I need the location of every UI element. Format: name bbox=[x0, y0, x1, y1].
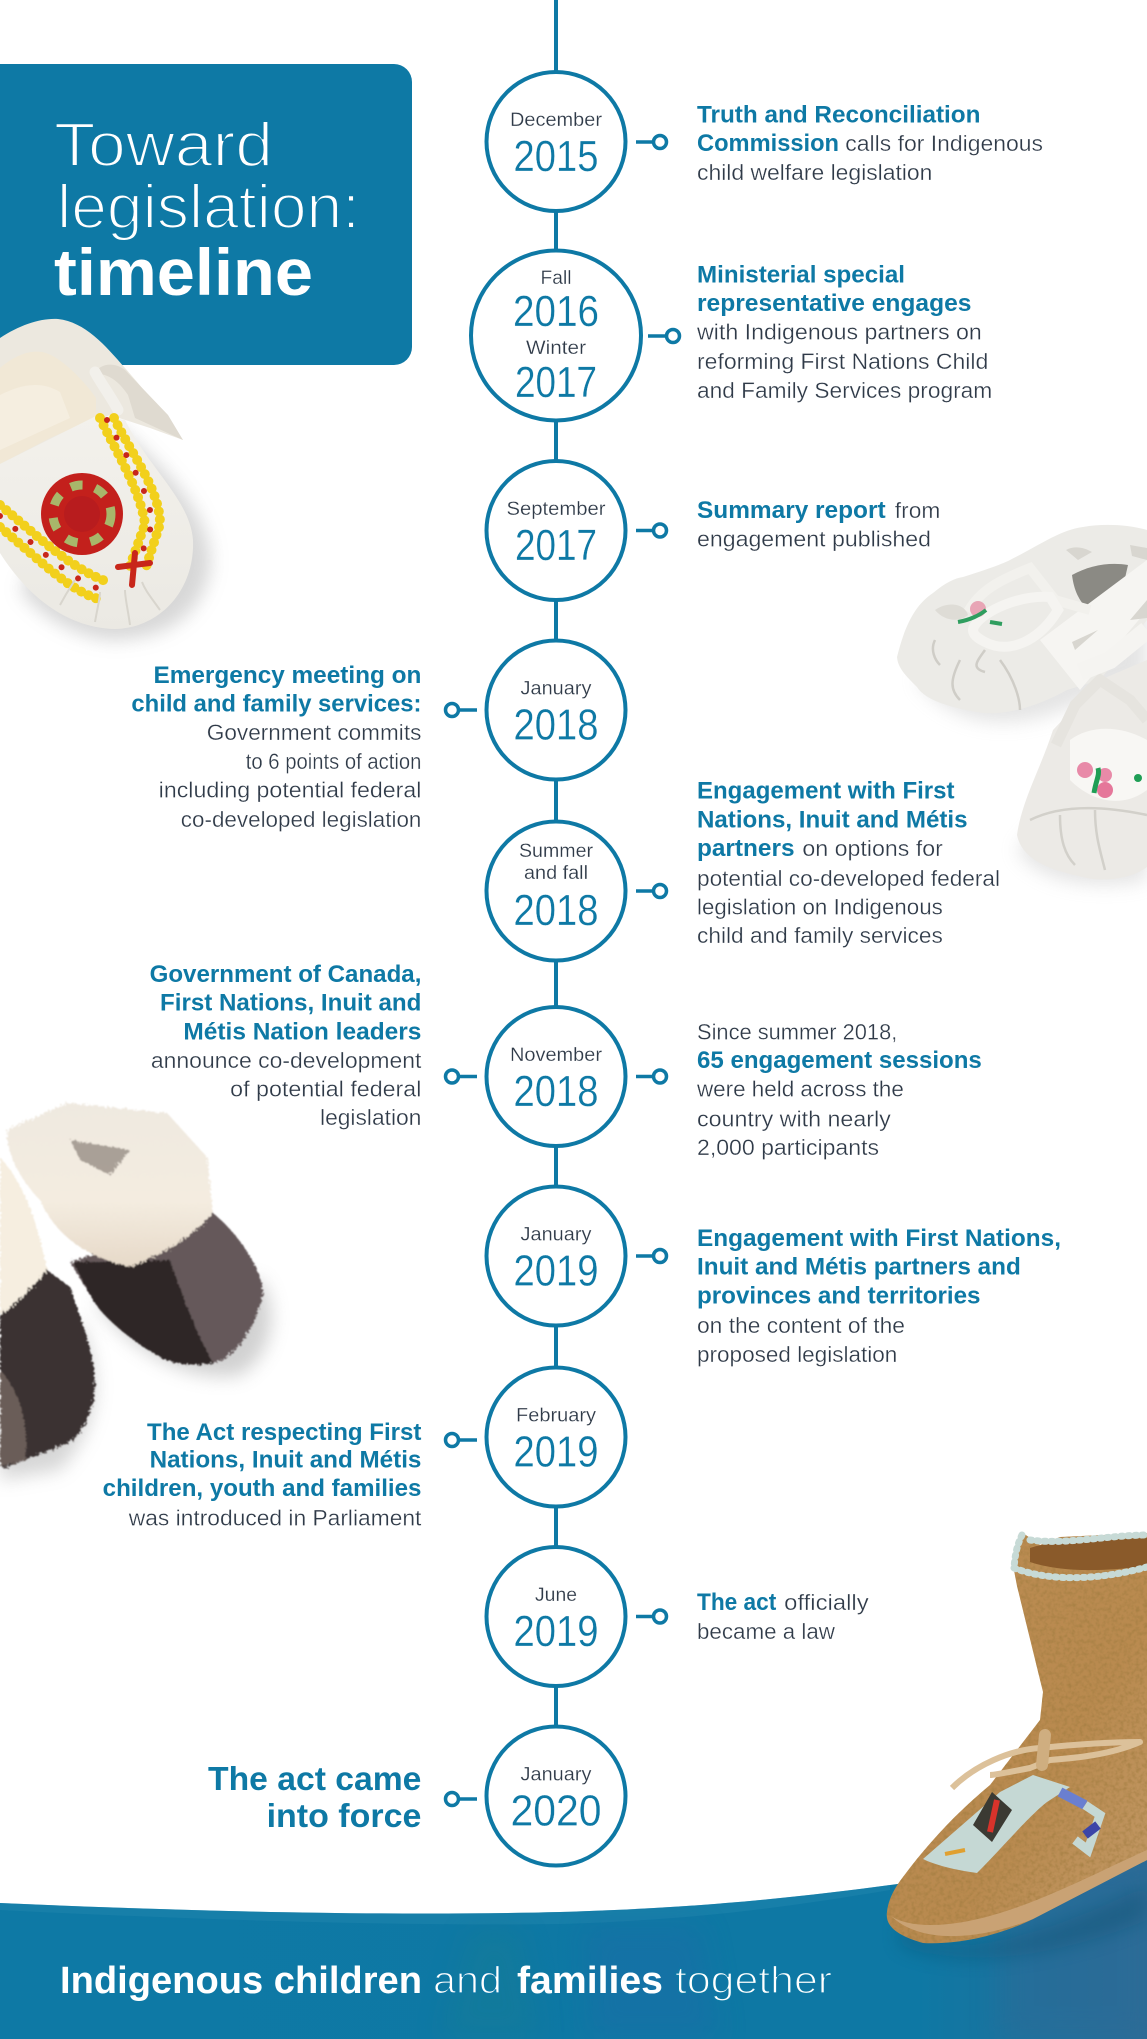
connector bbox=[446, 1434, 477, 1446]
node: January 2019 bbox=[486, 1186, 1061, 1367]
text: Engagement on proposed legislation: on the content of the bbox=[697, 1313, 905, 1338]
text: Government of Canada leaders: announce co-development bbox=[151, 1048, 421, 1073]
node: January 2020 bbox=[208, 1726, 626, 1866]
node: January 2018: January bbox=[520, 678, 592, 700]
text: 65 engagement sessions bbox=[696, 1019, 982, 1160]
node: September 2017: September bbox=[506, 499, 606, 520]
text: Engagement with partners bbox=[697, 778, 1000, 948]
node: September 2017: 2017 bbox=[515, 521, 597, 570]
node: February 2019: February bbox=[516, 1406, 597, 1426]
connector right bbox=[636, 1070, 666, 1083]
title: Toward legislation: timeline bbox=[54, 111, 360, 309]
text: Government of Canada leaders: Métis Nation leaders bbox=[183, 1018, 421, 1045]
text: Engagement on proposed legislation bbox=[697, 1225, 1061, 1367]
text: 65 engagement sessions: country with nearly bbox=[697, 1106, 891, 1131]
connector bbox=[636, 884, 666, 898]
text: Government of Canada leaders: legislation bbox=[320, 1105, 421, 1130]
connector bbox=[636, 524, 666, 537]
title: Toward legislation: timeline: Toward bbox=[54, 111, 273, 180]
text: The Act introduced: Nations, Inuit and Métis bbox=[150, 1446, 421, 1474]
title panel bbox=[0, 64, 412, 365]
node: February 2019 bbox=[103, 1368, 625, 1531]
text: Engagement on proposed legislation: Engagement with First Nations, bbox=[697, 1225, 1061, 1252]
text: Ministerial special representative: and Family Services program bbox=[697, 378, 992, 403]
connector bbox=[648, 330, 680, 342]
node: Fall 2016 Winter 2017 bbox=[471, 250, 992, 420]
photo: tan beaded moccasin boot bbox=[887, 1533, 1147, 1959]
title: Toward legislation: timeline: legislation: bbox=[57, 173, 360, 242]
slogan: families bbox=[517, 1960, 663, 2002]
node: January 2019: 2019 bbox=[514, 1246, 598, 1296]
text: Engagement with partners: potential co-developed federal bbox=[697, 866, 1000, 891]
text: Truth and Reconciliation Commission: Commission bbox=[697, 130, 839, 157]
text: Engagement on proposed legislation: proposed legislation bbox=[697, 1342, 897, 1367]
text: Ministerial special representative: representative engages bbox=[697, 290, 971, 317]
text: Summary report: Summary report bbox=[697, 497, 886, 524]
slogan: and bbox=[433, 1960, 502, 2002]
timeline spine bbox=[554, 0, 558, 1796]
text: The act became law: officially bbox=[784, 1590, 869, 1615]
node: November 2018: 2018 bbox=[514, 1067, 598, 1116]
text: Emergency meeting bbox=[131, 662, 421, 832]
text: Ministerial special representative: reforming First Nations Child bbox=[697, 349, 988, 374]
node: June 2019: 2019 bbox=[514, 1607, 598, 1656]
text: The Act introduced: was introduced in Parliament bbox=[128, 1506, 421, 1531]
text: Truth and Reconciliation Commission: Truth and Reconciliation bbox=[697, 102, 980, 128]
text: Engagement with partners: partners bbox=[697, 835, 794, 862]
node: Fall 2016 Winter 2017: Fall bbox=[540, 268, 572, 289]
node: Summer and fall 2018: 2018 bbox=[514, 886, 598, 935]
text: Engagement with partners: Nations, Inuit and Métis bbox=[697, 806, 968, 833]
text: Engagement with partners: child and family services bbox=[697, 923, 943, 948]
node: June 2019 bbox=[486, 1547, 869, 1686]
text: 65 engagement sessions: 65 engagement sessions bbox=[697, 1047, 982, 1074]
connector bbox=[636, 1610, 666, 1623]
text: Emergency meeting: Emergency meeting on bbox=[154, 662, 421, 689]
node: November 2018 bbox=[150, 961, 982, 1160]
text: Emergency meeting: Government commits bbox=[207, 720, 421, 745]
text: Engagement with partners: legislation on Indigenous bbox=[697, 894, 943, 919]
node: Summer and fall 2018 bbox=[486, 778, 1000, 960]
text: The Act introduced: children, youth and families bbox=[103, 1475, 421, 1502]
text: Ministerial special representative: Ministerial special bbox=[697, 262, 905, 288]
text: Engagement with partners: Engagement with First bbox=[697, 778, 955, 805]
node: Fall 2016 Winter 2017: 2017 bbox=[515, 358, 597, 407]
text: Truth and Reconciliation Commission bbox=[697, 102, 1043, 185]
node: June 2019: June bbox=[535, 1585, 577, 1606]
text: The Act introduced: The Act respecting First bbox=[147, 1419, 421, 1446]
node: Summer and fall 2018: and fall bbox=[524, 863, 588, 884]
slogan bbox=[60, 1960, 832, 2002]
node: January 2019: January bbox=[520, 1224, 592, 1246]
connector bbox=[636, 136, 666, 148]
text: Summary report: engagement published bbox=[697, 526, 931, 552]
title: Toward legislation: timeline: timeline bbox=[54, 235, 313, 309]
text: Engagement on proposed legislation: provinces and territories bbox=[697, 1282, 980, 1309]
text: Engagement with partners: on options for bbox=[802, 836, 943, 861]
text: Summary report bbox=[697, 497, 940, 552]
text: Summary report: from bbox=[895, 498, 940, 523]
footer band bbox=[0, 1850, 1147, 2039]
slogan: together bbox=[675, 1960, 832, 2002]
connector left bbox=[446, 1070, 477, 1083]
node: January 2018: 2018 bbox=[514, 700, 598, 750]
node: September 2017 bbox=[486, 461, 940, 600]
text: Emergency meeting: to 6 points of action bbox=[246, 749, 421, 774]
text: Ministerial special representative: with Indigenous partners on bbox=[696, 320, 982, 345]
node: Summer and fall 2018: Summer bbox=[519, 841, 594, 862]
text: Government of Canada leaders: of potential federal bbox=[230, 1076, 421, 1102]
node: January 2018 bbox=[131, 640, 626, 832]
text: The Act introduced bbox=[103, 1419, 421, 1531]
text: The act came into force bbox=[208, 1760, 421, 1834]
text: Emergency meeting: co-developed legislation bbox=[181, 807, 421, 832]
node: January 2020: January bbox=[520, 1764, 592, 1786]
text: Government of Canada leaders: Government of Canada, bbox=[150, 961, 421, 988]
text: The act became law: The act bbox=[697, 1589, 776, 1616]
text: The act came into force: The act came bbox=[208, 1760, 421, 1797]
node: December 2015: 2015 bbox=[514, 132, 598, 181]
text: Government of Canada leaders bbox=[150, 961, 421, 1130]
text: Engagement on proposed legislation: Inuit and Métis partners and bbox=[697, 1254, 1021, 1281]
text: The act became law bbox=[697, 1589, 869, 1644]
text: 65 engagement sessions: Since summer 2018, bbox=[697, 1019, 897, 1044]
connector bbox=[446, 704, 477, 716]
text: Government of Canada leaders: First Nations, Inuit and bbox=[160, 990, 421, 1017]
node: December 2015 bbox=[486, 72, 1043, 211]
photo: white moccasin with yellow and red beads bbox=[0, 319, 210, 640]
node: February 2019: 2019 bbox=[514, 1428, 598, 1476]
text: Ministerial special representative bbox=[696, 262, 992, 403]
node: January 2020: 2020 bbox=[510, 1786, 602, 1836]
text: Truth and Reconciliation Commission: calls for Indigenous bbox=[845, 131, 1043, 156]
node: November 2018: November bbox=[510, 1045, 603, 1066]
text: Emergency meeting: child and family services: bbox=[131, 691, 421, 718]
slogan: Indigenous children bbox=[60, 1960, 422, 2002]
text: Truth and Reconciliation Commission: child welfare legislation bbox=[697, 160, 932, 185]
connector bbox=[636, 1250, 666, 1262]
text: 65 engagement sessions: were held across the bbox=[696, 1076, 904, 1102]
node: Fall 2016 Winter 2017: 2016 bbox=[513, 287, 599, 336]
text: The act became law: became a law bbox=[697, 1619, 835, 1644]
text: The act came into force: into force bbox=[267, 1797, 421, 1834]
text: 65 engagement sessions: 2,000 participants bbox=[697, 1135, 879, 1160]
node: Fall 2016 Winter 2017: Winter bbox=[526, 338, 587, 359]
photo: pair of fur baby boots bbox=[0, 1103, 271, 1480]
photo: pair of white moccasins with pink floral beads bbox=[897, 525, 1147, 885]
connector bbox=[446, 1792, 477, 1806]
text: Emergency meeting: including potential federal bbox=[159, 777, 421, 802]
node: December 2015: December bbox=[510, 110, 603, 131]
